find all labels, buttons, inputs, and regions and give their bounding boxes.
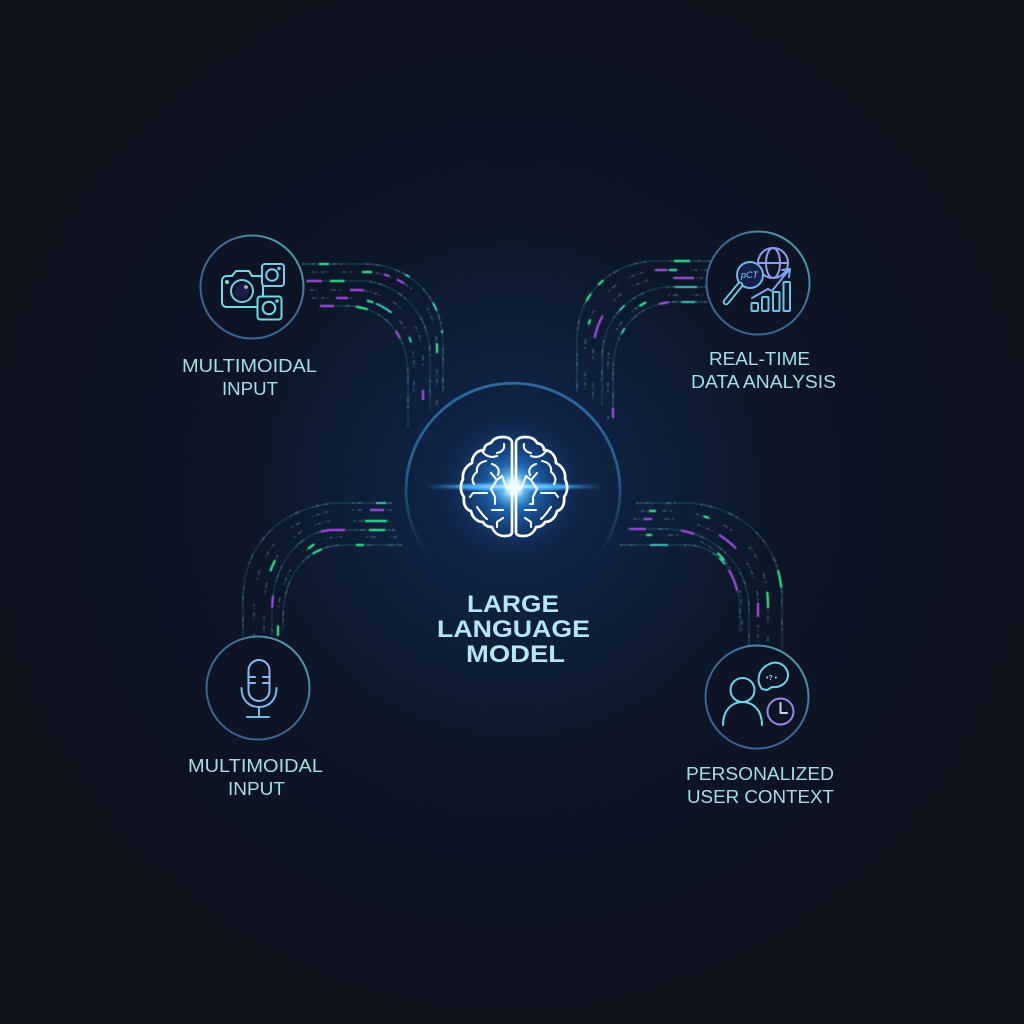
panel: bottom-right personalized user context (686, 646, 834, 807)
label: MULTIMOIDAL (182, 356, 317, 376)
data stream: top-left icon to centre (302, 264, 443, 428)
label: DATA ANALYSIS (691, 372, 836, 392)
icon ring (706, 646, 808, 748)
panel: top-right real-time data analysis (691, 232, 836, 392)
label: INPUT (228, 779, 285, 799)
label (188, 756, 323, 799)
icon: magnifier, globe and bars (726, 248, 790, 311)
icon ring (206, 636, 310, 740)
label: MULTIMOIDAL (188, 756, 323, 776)
label (182, 356, 317, 399)
label (691, 349, 836, 392)
icon: brain (461, 437, 567, 536)
data stream: bottom-right icon to centre (620, 503, 782, 648)
brain glow (425, 415, 603, 559)
icon: microphone (242, 660, 276, 717)
central ring (406, 383, 620, 572)
title: LARGE (467, 591, 559, 618)
label: PERSONALIZED (686, 764, 834, 784)
label: USER CONTEXT (687, 787, 834, 807)
icon: person, speech bubble and clock: •? • (766, 675, 778, 682)
label: INPUT (222, 379, 278, 399)
panel: bottom-left multimodal input (188, 636, 323, 799)
data stream: top-right icon to centre (577, 261, 710, 420)
icon: cameras (222, 264, 284, 320)
data stream: bottom-left icon to centre (243, 503, 402, 640)
title: MODEL (466, 641, 565, 668)
label (686, 764, 834, 807)
icon ring (200, 236, 304, 338)
panel: top-left multimodal input (182, 236, 317, 399)
icon: magnifier, globe and bars: pCT (740, 270, 760, 280)
icon: person, speech bubble and clock (723, 663, 794, 725)
title: LANGUAGE (437, 616, 590, 643)
title (437, 591, 590, 668)
icon ring (706, 232, 810, 334)
label: REAL-TIME (709, 349, 810, 369)
